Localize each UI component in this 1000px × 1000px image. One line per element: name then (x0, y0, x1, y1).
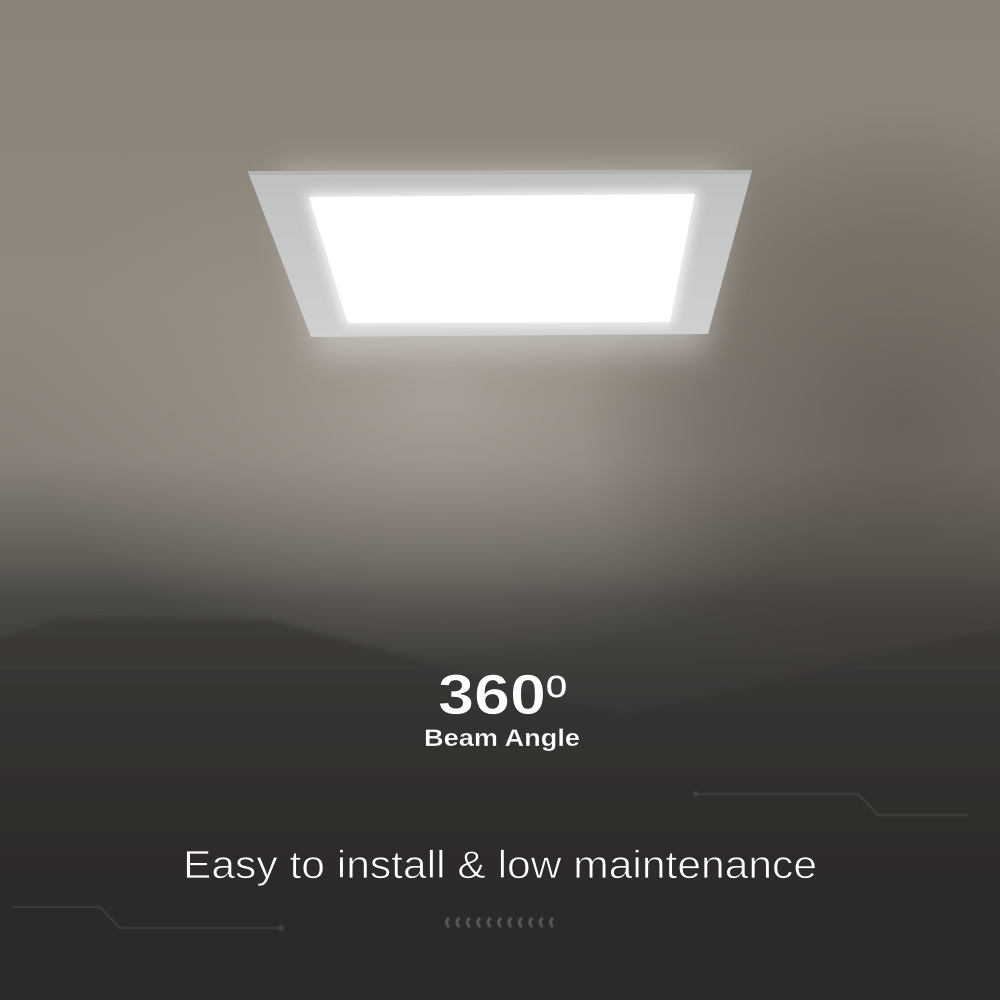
LED panel light (248, 170, 752, 356)
decorative circuit line: lower left (12, 907, 284, 931)
panel: white outer frame (248, 170, 752, 337)
chevron row (446, 918, 553, 927)
subheading: beam angle: Beam Angle (424, 725, 580, 752)
panel: light bloom on ceiling (275, 170, 730, 356)
panel: illuminated diffuser (309, 194, 695, 323)
headline: 360 degrees: 360 (438, 663, 546, 727)
decorative circuit line: upper right (694, 792, 968, 815)
room: ceiling and wall junction (0, 617, 1000, 1000)
degree mark: 0 (546, 669, 567, 704)
caption: easy to install: Easy to install & low maintenance (183, 844, 817, 887)
